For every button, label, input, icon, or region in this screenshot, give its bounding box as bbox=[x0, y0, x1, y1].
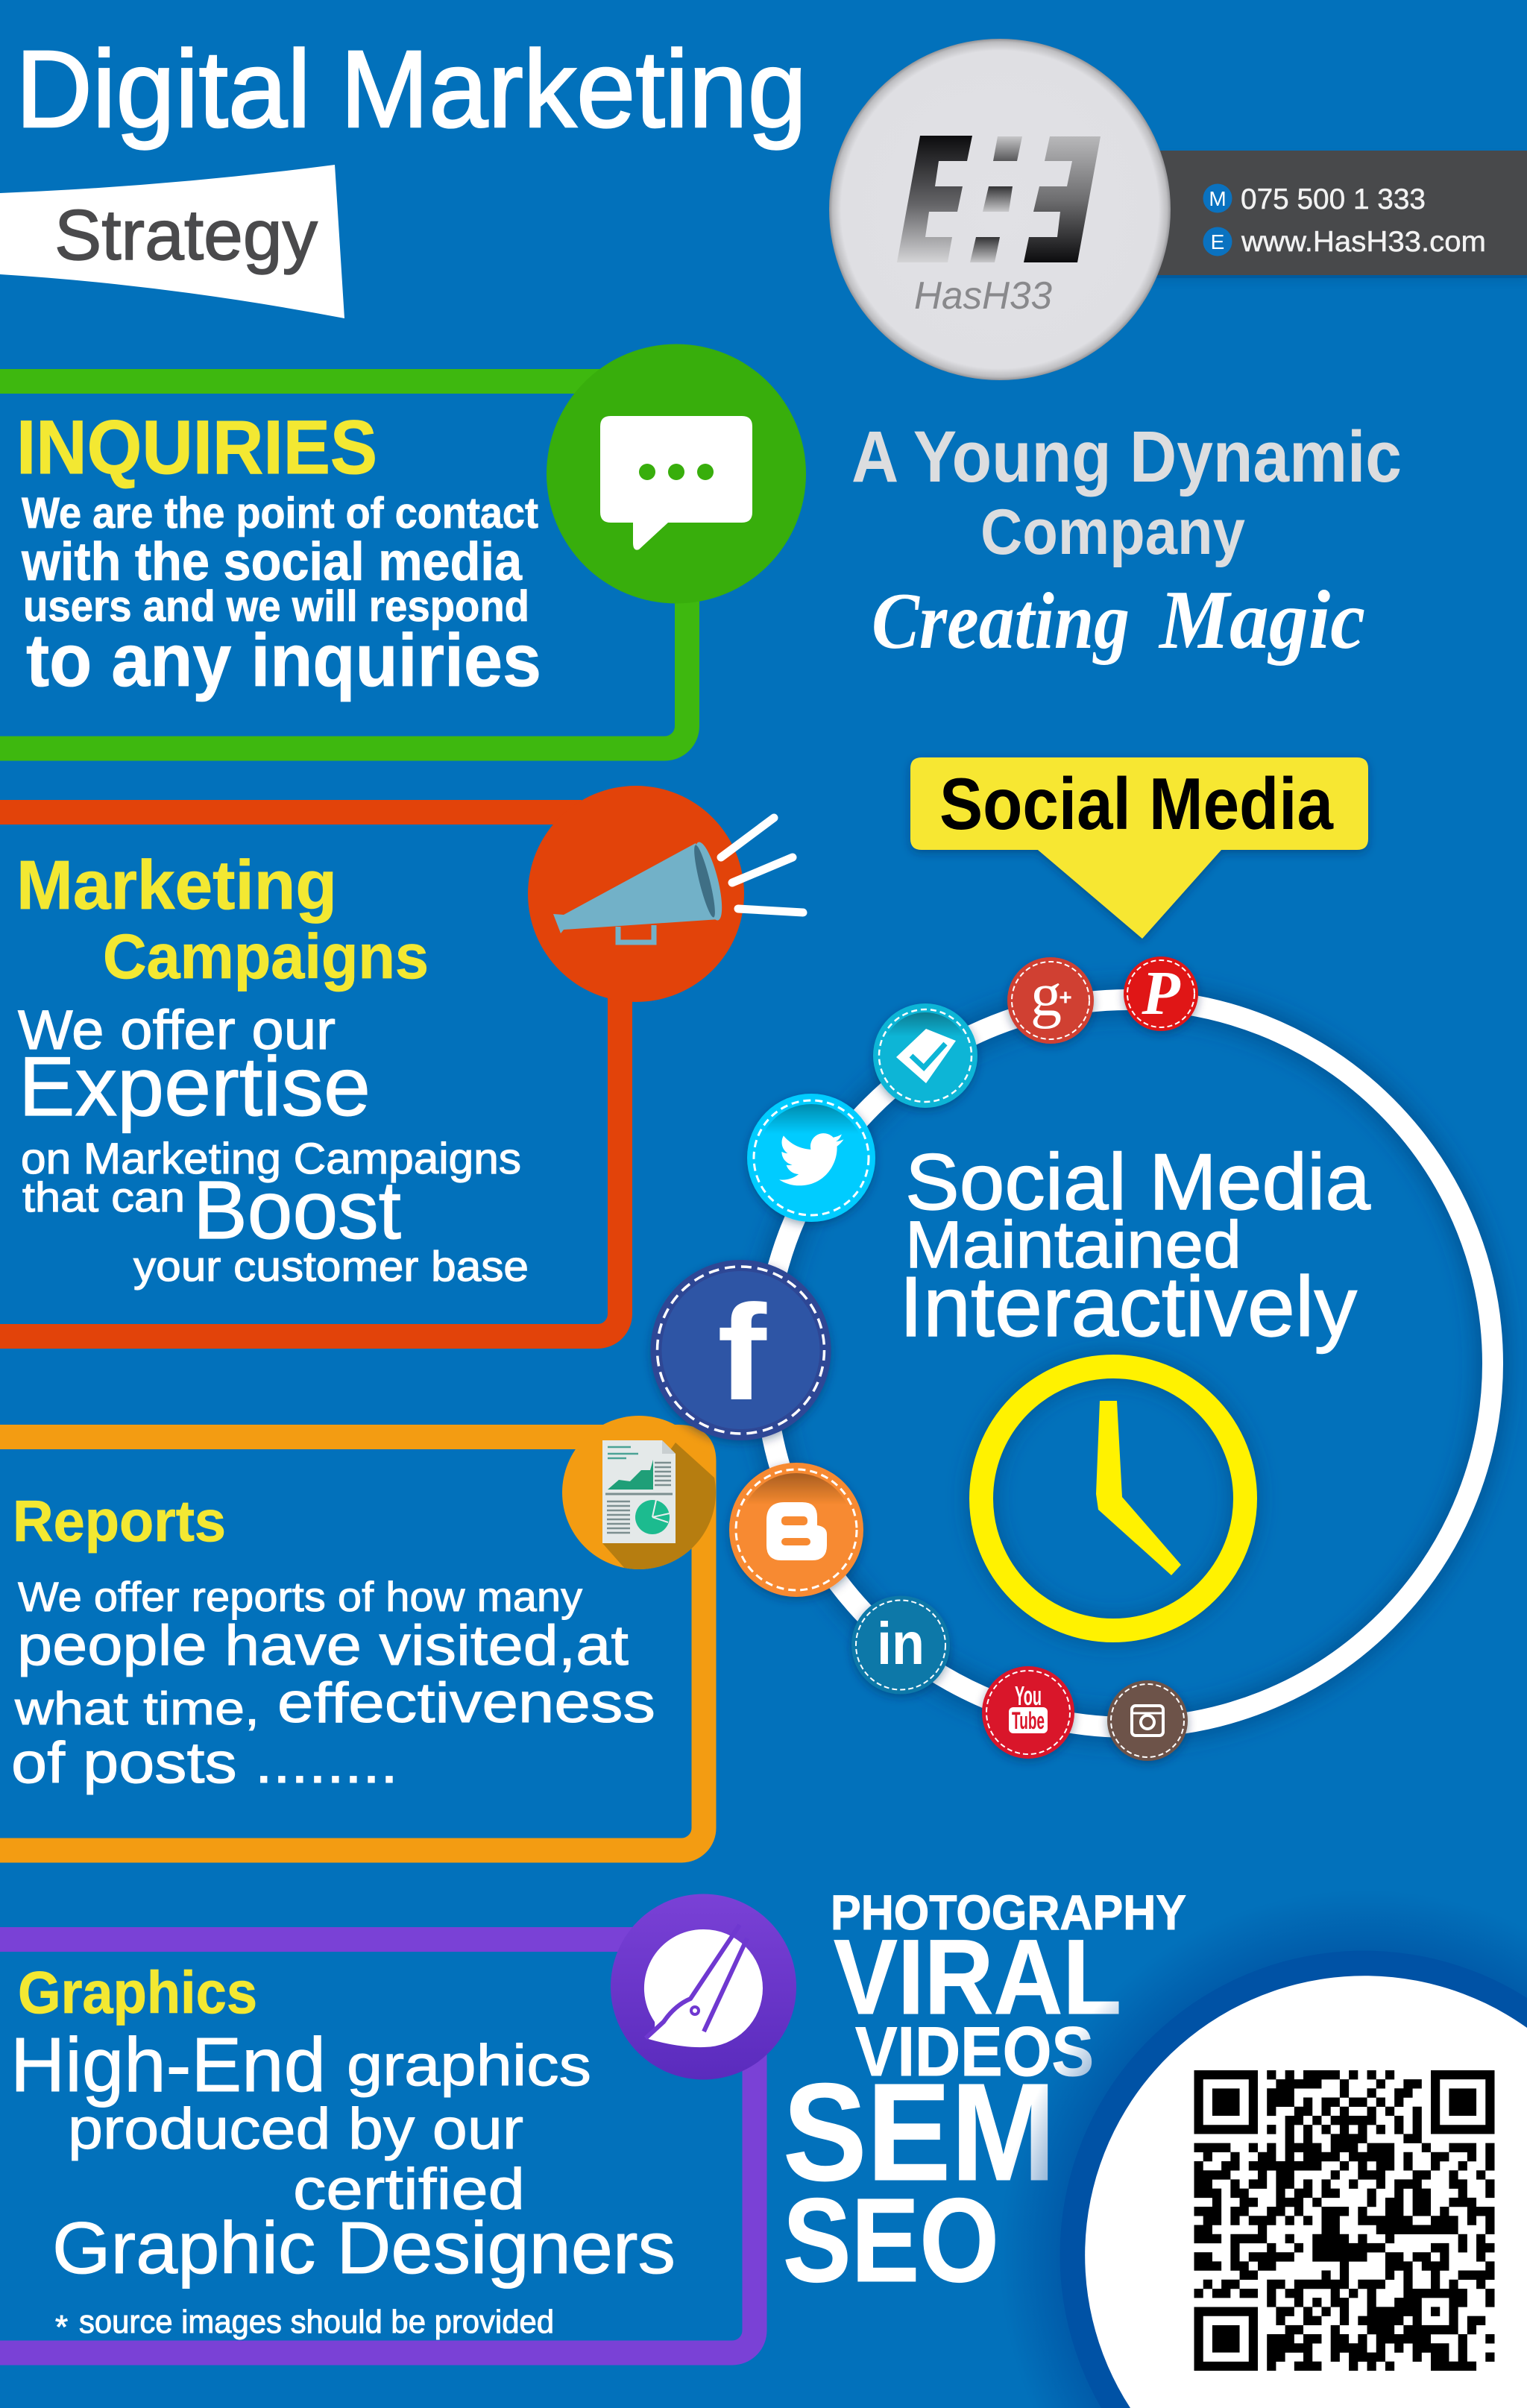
contact bar: www.HasH33.com bbox=[1241, 226, 1486, 258]
tagline bbox=[851, 416, 1402, 666]
heading: marketing campaigns bbox=[16, 846, 429, 992]
heading: inquiries: INQUIRIES bbox=[16, 405, 377, 490]
text: graphics body: * bbox=[55, 2309, 68, 2345]
heading: reports: Reports bbox=[13, 1488, 226, 1554]
tagline: Magic bbox=[1158, 574, 1365, 666]
text: inquiries body: to any inquiries bbox=[26, 619, 541, 702]
text: marketing body: on Marketing Campaigns bbox=[21, 1135, 521, 1183]
text: social media maintained interactively: Maintained bbox=[905, 1207, 1241, 1282]
icon: linkedin: in bbox=[877, 1610, 925, 1677]
icon: speech bubble bbox=[547, 344, 806, 604]
text: marketing body: Boost bbox=[193, 1164, 401, 1256]
text: inquiries body bbox=[21, 489, 541, 702]
text: social media maintained interactively: Interactively bbox=[899, 1260, 1357, 1355]
text: reports body bbox=[11, 1573, 655, 1795]
text: graphics body: Graphic Designers bbox=[52, 2207, 676, 2289]
icon: pinterest bbox=[1124, 956, 1198, 1031]
callout: Social Media bbox=[910, 757, 1368, 939]
callout: Social Media: Social Media bbox=[939, 763, 1334, 845]
text: graphics body: graphics bbox=[347, 2032, 591, 2098]
icon: facebook: f bbox=[717, 1276, 766, 1428]
text: graphics body: produced by our bbox=[68, 2096, 523, 2161]
contact bar: 075 500 1 333 bbox=[1241, 183, 1426, 215]
heading: graphics: Graphics bbox=[18, 1959, 257, 2026]
icon: pinterest: P bbox=[1141, 959, 1180, 1028]
text: graphics body: High-End bbox=[10, 2022, 326, 2108]
icon: megaphone bbox=[528, 786, 803, 1002]
text: inquiries body: with the social media bbox=[21, 532, 523, 592]
icon: report document bbox=[562, 1416, 716, 1569]
contact bar bbox=[1148, 151, 1527, 278]
text: reports body: effectiveness bbox=[277, 1671, 655, 1735]
title: Digital Marketing bbox=[16, 28, 807, 151]
text: services list: VIDEOS bbox=[855, 2012, 1094, 2090]
text: reports body: what time, bbox=[14, 1683, 259, 1735]
text: reports body: We offer reports of how many bbox=[18, 1573, 582, 1620]
text: services list bbox=[783, 1885, 1186, 2307]
icon: youtube: You bbox=[1015, 1680, 1042, 1711]
icon: youtube bbox=[982, 1666, 1074, 1759]
tagline: Creating bbox=[872, 577, 1130, 666]
text: graphics body: certified bbox=[293, 2156, 525, 2222]
logo badge: HasH33 bbox=[914, 274, 1052, 318]
heading: marketing campaigns: Campaigns bbox=[103, 921, 429, 992]
qr code badge bbox=[999, 1890, 1527, 2408]
text: reports body: of posts ........ bbox=[11, 1730, 398, 1795]
banner: Strategy: Strategy bbox=[54, 195, 318, 275]
text: marketing body: that can bbox=[22, 1173, 185, 1220]
icon: facebook bbox=[650, 1260, 831, 1440]
text: inquiries body: users and we will respond bbox=[23, 582, 529, 631]
icon: linkedin bbox=[851, 1595, 950, 1694]
text: graphics body bbox=[10, 2022, 676, 2345]
qr code bbox=[1194, 2070, 1494, 2371]
panel: inquiries bbox=[0, 344, 806, 748]
text: graphics body: source images should be provided bbox=[79, 2304, 554, 2340]
tagline: A Young Dynamic bbox=[851, 416, 1402, 497]
text: marketing body bbox=[18, 999, 529, 1290]
logo badge bbox=[829, 39, 1171, 380]
icon: google plus bbox=[1007, 957, 1094, 1044]
panel: graphics bbox=[0, 1894, 796, 2353]
icon: google plus: g bbox=[1030, 960, 1062, 1030]
heading: marketing campaigns: Marketing bbox=[16, 846, 337, 924]
text: social media maintained interactively: Social Media bbox=[905, 1137, 1370, 1226]
text: services list: PHOTOGRAPHY bbox=[831, 1885, 1186, 1940]
icon: blogger bbox=[729, 1463, 863, 1597]
contact bar: M bbox=[1209, 187, 1227, 210]
icon: clock bbox=[981, 1367, 1245, 1630]
text: services list: SEO bbox=[783, 2173, 999, 2307]
panel: reports bbox=[0, 1416, 746, 1850]
panel: marketing campaigns bbox=[0, 786, 803, 1337]
text: services list: SEM bbox=[783, 2055, 1056, 2210]
icon: twitter bbox=[747, 1094, 875, 1222]
icon: instagram bbox=[1107, 1680, 1188, 1761]
banner: Strategy bbox=[0, 165, 344, 318]
text: marketing body: Expertise bbox=[19, 1040, 371, 1133]
icon: google plus: + bbox=[1059, 986, 1072, 1010]
text: social media maintained interactively bbox=[899, 1137, 1370, 1355]
icon: foursquare check bbox=[873, 1003, 977, 1108]
text: services list: VIRAL bbox=[834, 1918, 1121, 2037]
text: marketing body: We offer our bbox=[18, 999, 336, 1061]
text: marketing body: your customer base bbox=[133, 1243, 529, 1290]
text: reports body: people have visited,at bbox=[17, 1614, 629, 1677]
contact bar: E bbox=[1211, 230, 1224, 253]
icon: paint brush bbox=[611, 1894, 796, 2080]
icon: youtube: Tube bbox=[1012, 1707, 1045, 1734]
text: inquiries body: We are the point of contact bbox=[22, 489, 538, 538]
tagline: Company bbox=[980, 497, 1245, 568]
social media ring bbox=[650, 956, 1493, 1761]
